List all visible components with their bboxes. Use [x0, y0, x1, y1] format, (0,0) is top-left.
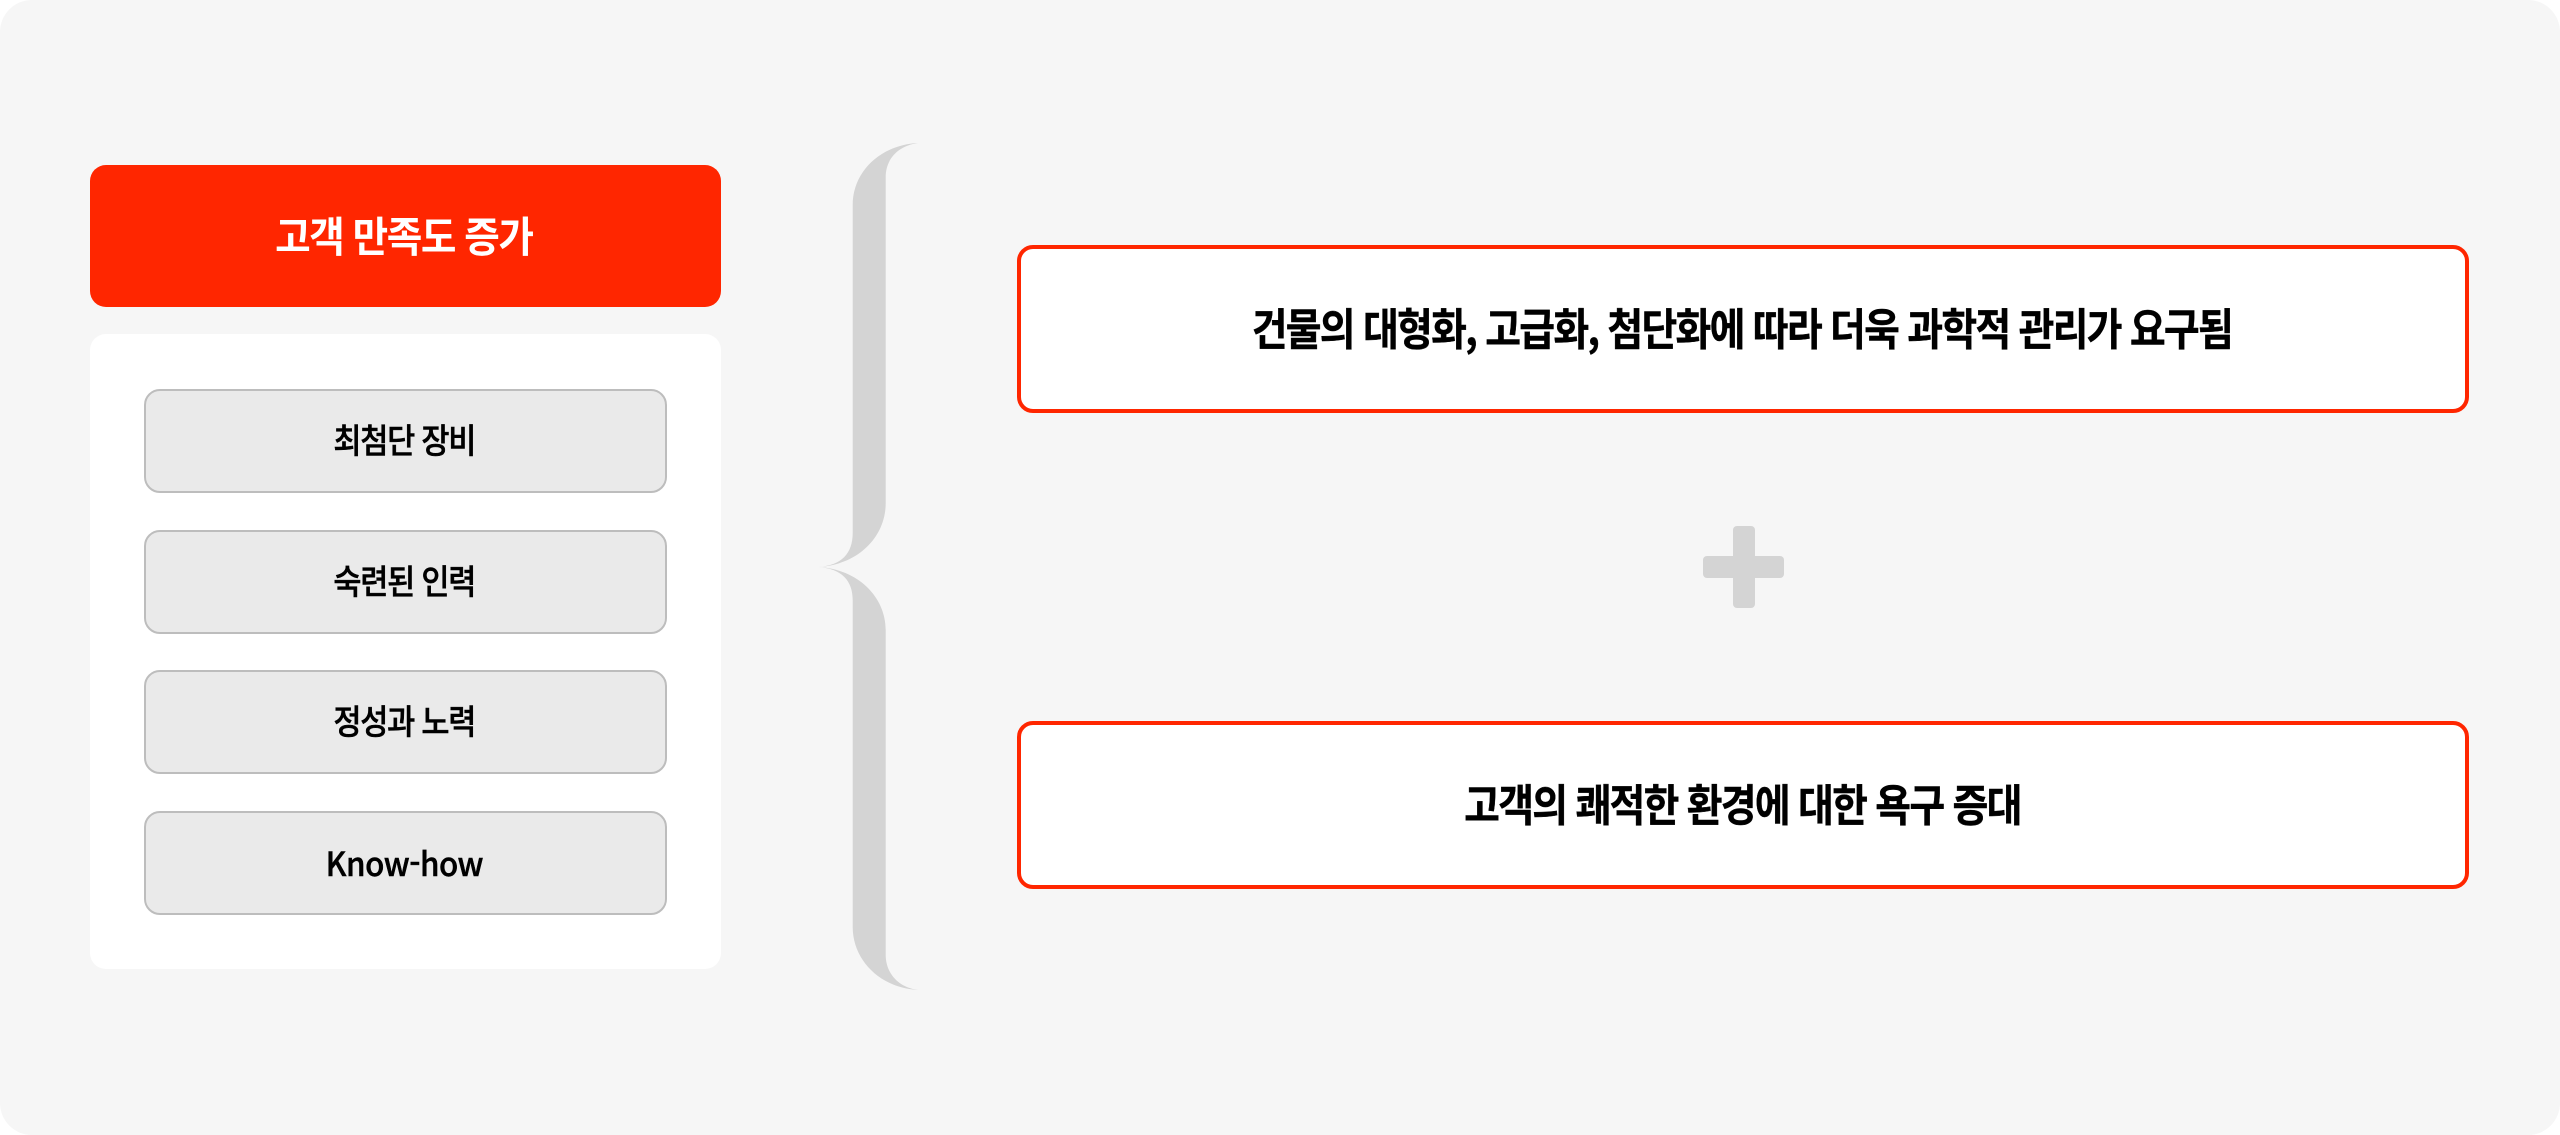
list item: care and effort: 정성과 노력	[333, 694, 475, 744]
box: customer comfort demand	[1017, 721, 2469, 889]
panel: factors list	[90, 334, 721, 969]
box: building management need: 건물의 대형화, 고급화, 첨단화에 따라 더욱 과학적 관리가 요구됨	[1252, 294, 2232, 358]
list item: skilled staff: 숙련된 인력	[333, 554, 475, 604]
box: customer comfort demand: 고객의 쾌적한 환경에 대한 욕구 증대	[1464, 770, 2020, 834]
icon: plus	[1703, 526, 1784, 608]
list item: latest equipment: 최첨단 장비	[333, 414, 475, 462]
box: building management need	[1017, 245, 2469, 413]
list item: know-how	[144, 811, 667, 915]
heading: customer satisfaction increase: 고객 만족도 증가	[275, 204, 532, 264]
heading: customer satisfaction increase	[90, 165, 721, 307]
list item: care and effort	[144, 670, 667, 774]
list item: latest equipment	[144, 389, 667, 493]
list item: skilled staff	[144, 530, 667, 634]
list item: know-how: Know-how	[325, 838, 483, 886]
